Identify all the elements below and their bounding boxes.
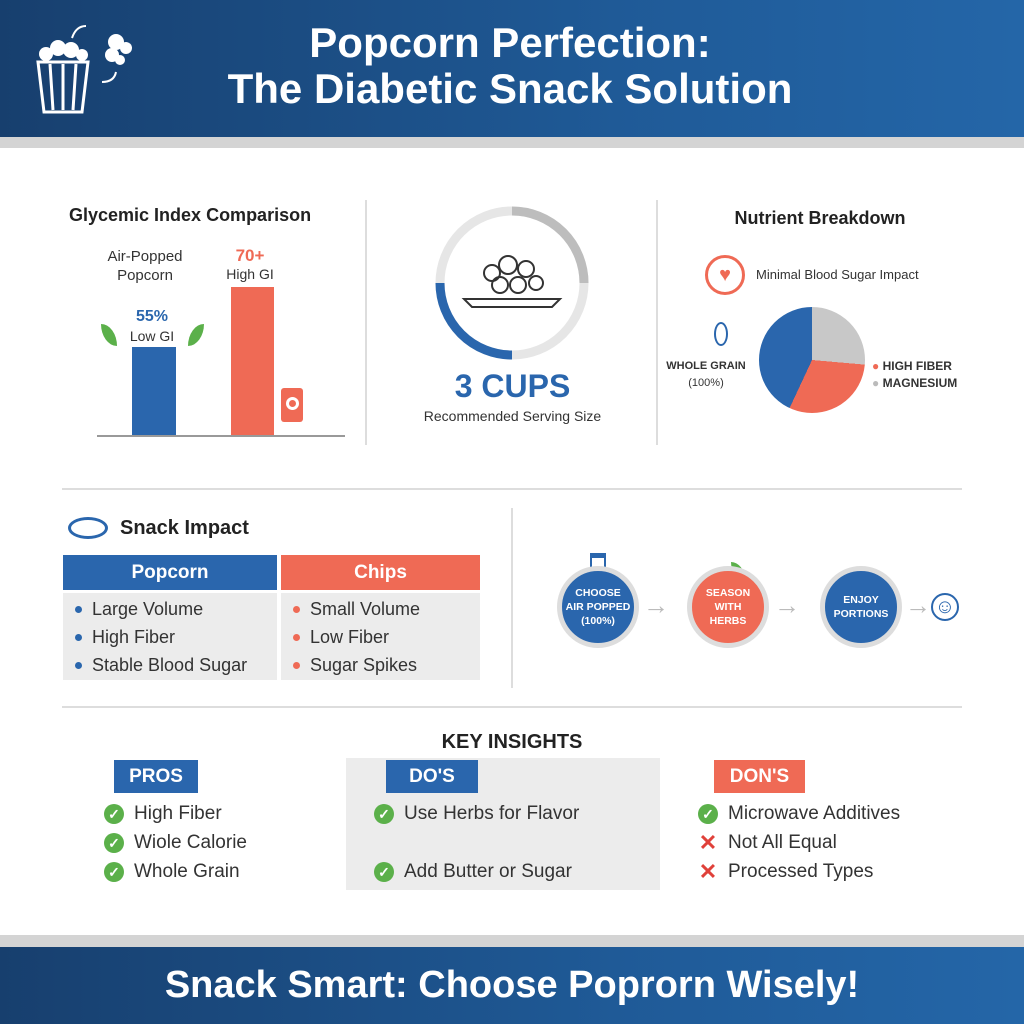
panel: don'ts: ✓ (702, 806, 714, 822)
donut ring (436, 206, 588, 360)
table (63, 555, 277, 590)
labels (107, 248, 183, 284)
panel: pros: Whole Grain (134, 861, 240, 882)
step 2: WITH (715, 601, 741, 613)
step 1 (557, 566, 639, 648)
icon: popcorn (590, 553, 606, 573)
step 3: ENJOY (843, 594, 879, 606)
step 3 (820, 566, 902, 648)
panel: do's: Add Butter or Sugar (404, 861, 572, 882)
step 1: AIR POPPED (566, 601, 630, 613)
panel: do's: Use Herbs for Flavor (404, 803, 579, 824)
panel: glycemic index: 55% (136, 308, 168, 325)
footer: Snack Smart: Choose Poprorn Wisely! (165, 964, 859, 1006)
icon: chip bag (281, 388, 303, 422)
icon: leaves (101, 324, 117, 346)
panel: do's: ✓ (378, 806, 390, 822)
panel: snack impact: Low Fiber (310, 627, 389, 647)
icon: leaf (731, 562, 745, 580)
step 2: SEASON (706, 587, 750, 599)
flow diagram (557, 553, 959, 648)
panel: snack impact: Stable Blood Sugar (92, 655, 247, 675)
legend: ● MAGNESIUM (872, 376, 957, 390)
step 2: HERBS (710, 615, 746, 627)
icon: smiley (931, 593, 959, 621)
icon: heart (705, 255, 745, 295)
panel: glycemic index: 70+ (236, 246, 264, 265)
key insights heading: KEY INSIGHTS (442, 731, 582, 753)
panel: do's: ✓ (378, 864, 390, 880)
panel: pros: ✓ (108, 864, 120, 880)
panel: snack impact: Small Volume (310, 599, 420, 619)
panel: do's: DO'S (409, 766, 455, 787)
icon: smiley: ☺ (935, 596, 955, 618)
panel: glycemic index: Low GI (130, 328, 174, 344)
labels: Air-Popped (107, 248, 183, 265)
title: The Diabetic Snack Solution (228, 65, 792, 112)
footer (0, 947, 1024, 1024)
panel: serving size: Recommended Serving Size (424, 408, 601, 424)
panel: pros (104, 760, 247, 882)
panel: snack impact: Sugar Spikes (310, 655, 417, 675)
heading: Glycemic Index Comparison (69, 205, 311, 225)
panel: don'ts: Microwave Additives (728, 803, 900, 824)
title: Popcorn Perfection: (309, 19, 711, 66)
icon: popcorn bucket (36, 25, 132, 114)
heading: Snack Impact (120, 517, 249, 539)
panel: don'ts: DON'S (730, 766, 789, 787)
icon: plate (68, 517, 108, 539)
step 3: PORTIONS (834, 608, 888, 620)
flow diagram: → (905, 590, 931, 620)
step 1: CHOOSE (575, 587, 621, 599)
panel: nutrient breakdown: WHOLE GRAIN (666, 360, 746, 372)
panel: don'ts: ✕ (699, 859, 717, 884)
panel: don'ts (698, 760, 900, 884)
panel: pros: ✓ (108, 835, 120, 851)
header (0, 0, 1024, 137)
panel: snack impact: High Fiber (92, 627, 175, 647)
panel: glycemic index (69, 205, 345, 437)
panel: pros: Wiole Calorie (134, 832, 247, 853)
icon: heart: ♥ (719, 264, 731, 286)
legend: ● HIGH FIBER (872, 359, 952, 373)
stat: 3 cups: 3 CUPS (455, 368, 570, 404)
heading: Nutrient Breakdown (734, 208, 906, 228)
pie chart (757, 305, 867, 415)
panel: do's (346, 758, 660, 890)
legend (872, 359, 957, 390)
table: Popcorn (131, 562, 209, 583)
panel: nutrient breakdown: (100%) (688, 377, 724, 389)
step 2 (687, 566, 769, 648)
icon: grain (714, 322, 728, 346)
panel: snack impact: Chips (354, 562, 407, 583)
panel: pros: ✓ (108, 806, 120, 822)
bar chart (132, 347, 176, 435)
panel: snack impact: Large Volume (92, 599, 203, 619)
panel: don'ts: Not All Equal (728, 832, 837, 853)
panel: nutrient breakdown: Minimal Blood Sugar Impact (756, 267, 919, 282)
step 1: (100%) (581, 615, 615, 627)
panel: don'ts: Processed Types (728, 861, 873, 882)
labels: Popcorn (117, 267, 173, 284)
panel: glycemic index: High GI (226, 266, 274, 282)
panel: pros: High Fiber (134, 803, 222, 824)
panel: don'ts: ✕ (699, 830, 717, 855)
icon: popcorn bowl (464, 256, 560, 307)
flow diagram: → (643, 590, 669, 620)
title (228, 19, 792, 112)
flow diagram: → (774, 590, 800, 620)
panel: serving size (424, 206, 601, 424)
panel: pros: PROS (129, 766, 183, 787)
panel: nutrient breakdown (666, 208, 957, 413)
panel: snack impact (63, 517, 480, 680)
